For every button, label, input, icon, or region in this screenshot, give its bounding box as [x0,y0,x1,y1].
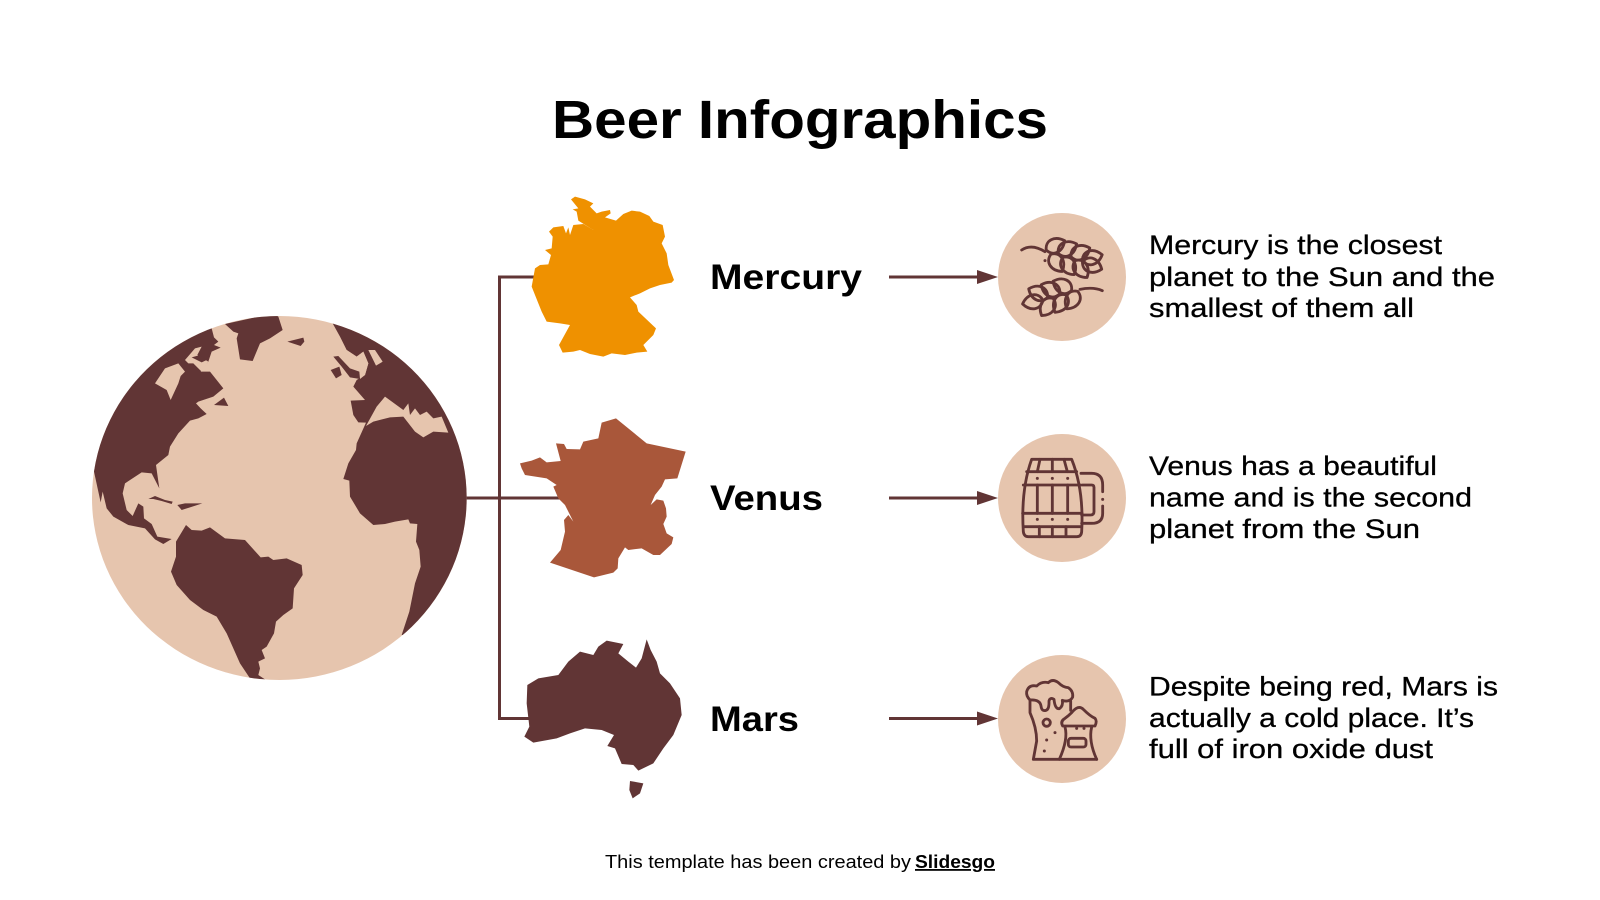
label: Mars: Mars [710,700,799,739]
footer credit: Slidesgo [915,852,995,872]
globe landmasses [94,316,467,680]
text block: Venus [1149,451,1472,544]
text block: Mars: actually a cold place. It’s [1149,703,1474,733]
arrow: Venus [889,491,998,505]
title: Beer Infographics [552,90,1048,150]
text block: Venus: Venus has a beautiful [1149,451,1437,481]
arrow: Mercury [889,270,998,284]
text block: Venus: name and is the second [1149,482,1472,512]
text block: Mars [1149,672,1498,764]
arrow: Mars [889,712,998,726]
icon circle: beer and malt sack [998,655,1126,783]
map: Germany [532,197,674,357]
text block: Mercury [1149,230,1495,323]
text block: Mars: Despite being red, Mars is [1149,672,1498,702]
label: Venus: Venus [710,479,823,518]
map: Australia [524,639,682,798]
icon circle: wheat [998,213,1126,341]
connector lines from globe to countries [466,277,560,718]
label: Mercury: Mercury [710,258,863,297]
icon circle: barrel mug [998,434,1126,562]
map: France [520,418,686,577]
globe ocean [92,316,467,680]
text block: Mercury: smallest of them all [1149,293,1414,323]
footer credit: This template has been created by [605,852,911,872]
text block: Mercury: planet to the Sun and the [1149,262,1495,292]
text block: Mercury: Mercury is the closest [1149,230,1443,260]
globe [92,316,467,680]
text block: Mars: full of iron oxide dust [1149,734,1434,764]
text block: Venus: planet from the Sun [1149,514,1420,544]
